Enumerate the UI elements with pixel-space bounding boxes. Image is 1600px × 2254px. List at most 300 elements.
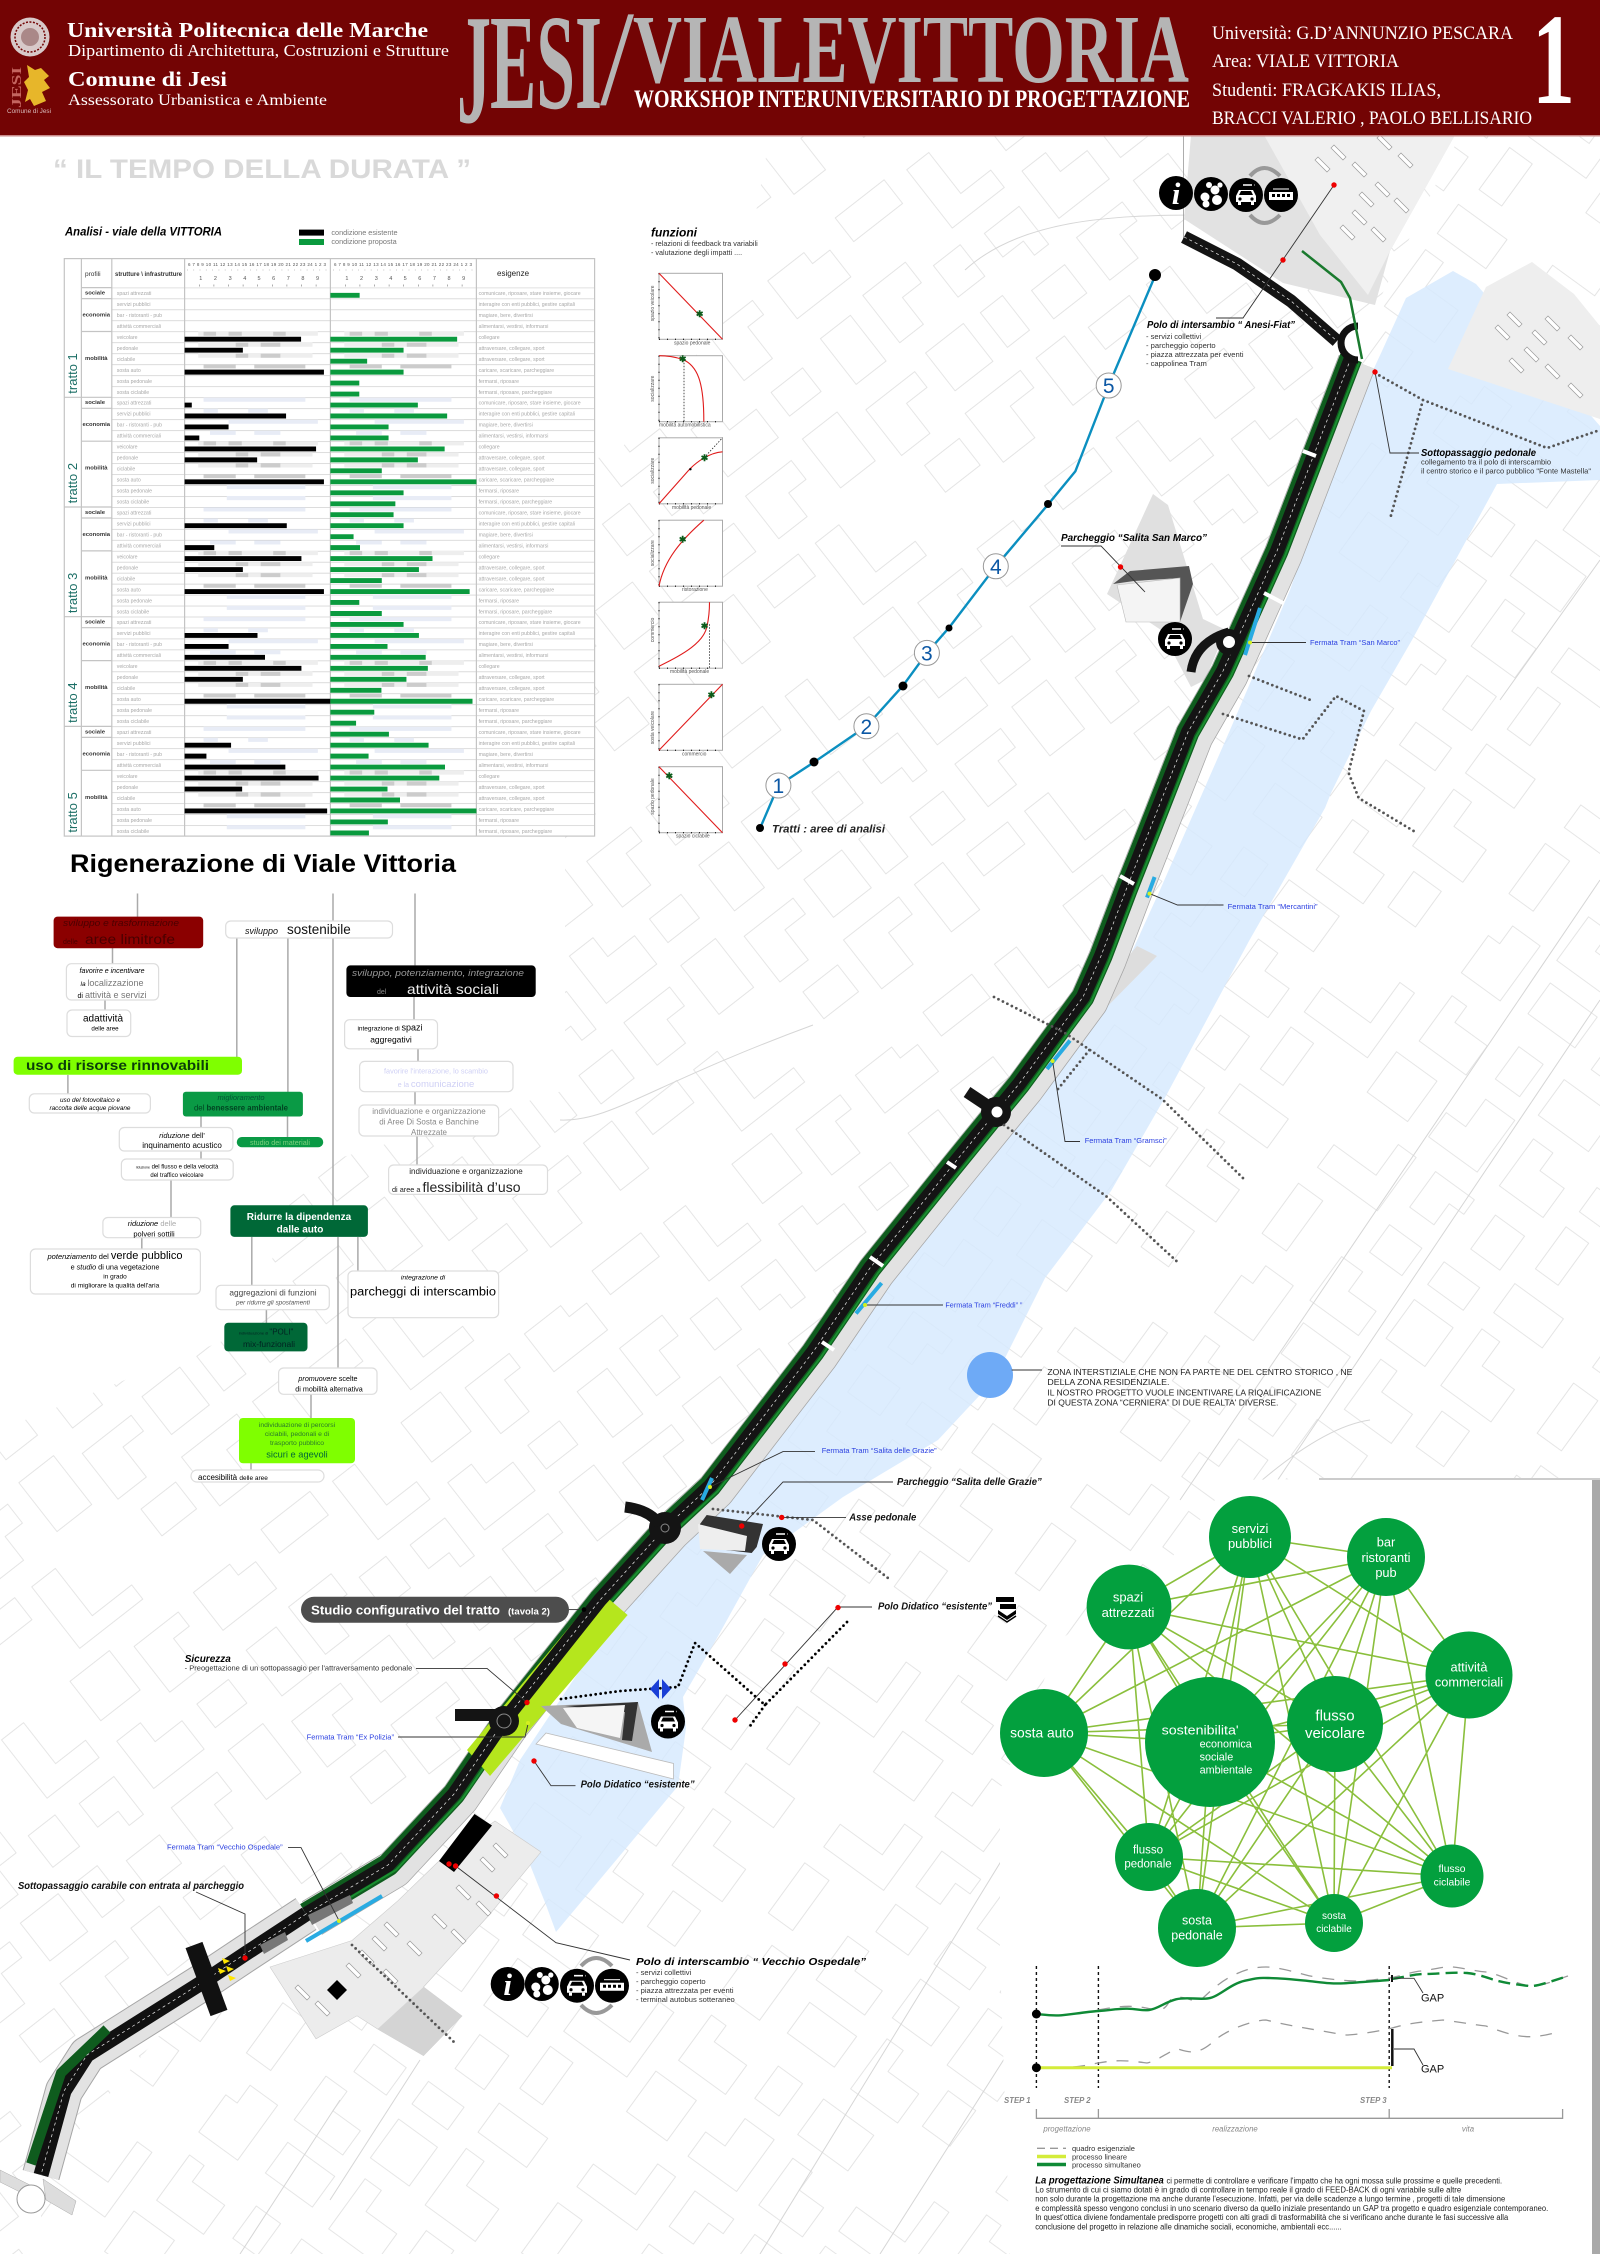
label: fermata Gramsci	[1051, 1059, 1167, 1145]
node: risorse rinnovabili: uso di risorse rinnovabili	[26, 1058, 209, 1073]
subtitle: “ IL TEMPO DELLA DURATA ”	[53, 154, 471, 184]
tratto 3 rows	[65, 510, 581, 615]
tratto 4 rows: fermarsi, riposare, parcheggiare	[479, 719, 552, 725]
label: polo didattico with leader	[732, 1602, 992, 1723]
tratto 3 rows: collegare	[479, 554, 500, 560]
node: spazi aggregativi: integrazione di spazi	[357, 1022, 423, 1032]
node: sicuri e agevoli	[239, 1418, 355, 1463]
node: sviluppo sostenibile	[226, 921, 392, 938]
table bars: existing condition (black)	[185, 337, 330, 813]
tratto 2 rows: spazi attrezzati	[117, 401, 151, 407]
table faint activity bars	[198, 332, 464, 829]
icon: Jesi crest	[7, 65, 51, 115]
tratto 3 rows: attraversare, collegare, sport	[479, 565, 545, 571]
node: sosta pedonale: sosta	[1182, 1914, 1212, 1928]
tratti label: Tratti : aree di analisi	[772, 823, 886, 835]
explanatory paragraph	[1035, 2174, 1548, 2231]
chart: socializzare / ristorazione: socializzare	[650, 540, 656, 566]
tratto 4 rows: fermarsi, riposare	[479, 708, 519, 714]
node: sosta ciclabile: sosta	[1322, 1911, 1346, 1922]
tratto 2 rows: sosta auto	[117, 478, 141, 484]
tratto 1 rows: spazi attrezzati	[117, 291, 151, 297]
node: comunicazione: favorire l'interazione, lo scambio	[384, 1066, 488, 1076]
tratto 1 rows: ciclabile	[117, 357, 135, 363]
tratto 1 rows: sosta pedonale	[117, 379, 152, 385]
map: parking Salita delle Grazie building	[698, 1515, 763, 1574]
node: aree di sosta	[359, 1105, 499, 1137]
pill: studio configurativo: (tavola 2)	[508, 1606, 550, 1616]
tratto 5 rows: mobilità	[85, 795, 108, 801]
icon: Jesi crest: JESI	[10, 67, 25, 108]
node: attività sociali	[346, 965, 536, 997]
node: aree limitrofe	[54, 917, 203, 948]
lower GAP: GAP	[1421, 2064, 1444, 2076]
icon: Jesi crest: Comune di Jesi	[7, 108, 51, 115]
chart: GAP timeline	[1004, 1966, 1568, 2231]
tratto 5 rows: ciclabile	[117, 796, 135, 802]
panel: analysis table	[64, 227, 595, 836]
node: sostenibilità: sostenibilita'	[1162, 1722, 1239, 1737]
explanatory paragraph: Lo strumento di cui ci siamo dotati è in grado di controllare in tempo reale il grado di FEED-BACK di ogni variabile sulle altre	[1035, 2186, 1461, 2194]
node: polveri sottili	[103, 1218, 201, 1238]
node: poli mix-funzionali: mix-funzionali	[243, 1339, 295, 1349]
node: localizzazione: favorire e incentivare	[80, 968, 145, 975]
header: institutions: Dipartimento di Architettura, Costruzioni e Strutture	[68, 41, 449, 60]
needs curve (upper)	[1098, 1967, 1568, 2010]
tratto 3 rows: sosta pedonale	[117, 598, 152, 604]
tratto 4 rows: sosta auto	[117, 697, 141, 703]
tratto 3 rows: caricare, scaricare, parcheggiare	[479, 587, 554, 593]
label: polo Anesi-Fiat: Polo di intersambio “ Anesi-Fiat”	[1147, 319, 1296, 331]
stop 4	[983, 554, 1008, 579]
label: polo Anesi-Fiat: - piazza attrezzata per eventi	[1146, 350, 1244, 359]
panel: network diagram	[1000, 1496, 1512, 1967]
tratto 5 rows: pedonale	[117, 785, 138, 791]
node: aree di sosta: di Aree Di Sosta e Banchine	[379, 1118, 479, 1126]
label: fermata ex polizia	[307, 1721, 530, 1742]
tratto 5 rows: sociale	[85, 729, 106, 735]
label: fermata Mercantini	[1148, 892, 1318, 911]
tratto 1 rows: servizi pubblici	[117, 302, 151, 308]
chart: sosta veicolare / commercio: sosta veicolare	[650, 711, 656, 744]
tratto 3 rows: sosta ciclabile	[117, 609, 149, 615]
tratto 5 rows: spazi attrezzati	[117, 730, 151, 736]
tratto 2 rows: sociale	[85, 400, 106, 406]
label: fermata Freddi	[863, 1300, 1023, 1310]
node: adattività: adattività	[83, 1013, 123, 1024]
explanatory paragraph: ci permette di controllare e verificare l'impatto che ha ogni mossa sulle prossime e quelle precedenti.	[1166, 2176, 1502, 2185]
icons: polo Anesi-Fiat	[1159, 168, 1298, 223]
diagram: tratti line with numbered stops	[756, 269, 1161, 835]
tratto 2 rows: mobilità	[85, 466, 108, 472]
tratto 3 rows: attività commerciali	[117, 543, 161, 549]
node: verde pubblico: in grado	[103, 1274, 127, 1280]
node: aree di sosta: Attrezzate	[411, 1128, 448, 1137]
label: polo vecchio ospedale: Polo di interscambio “ Vecchio Ospedale”	[636, 1956, 867, 1968]
node: mobilità alternativa	[279, 1368, 377, 1394]
node: servizi pubblici: servizi	[1232, 1521, 1269, 1536]
icons: polo vecchio ospedale: i	[503, 1967, 512, 2002]
pill: studio configurativo	[301, 1597, 586, 1623]
node: fotovoltaico: raccolta delle acque piovane	[49, 1105, 131, 1112]
tratto 5 rows: bar - ristoranti - pub	[117, 752, 162, 758]
node: localizzazione: di attività e servizi	[78, 990, 146, 1000]
label: fermata Salita delle Grazie: Fermata Tram “Salita delle Grazie”	[822, 1446, 937, 1455]
stop 2	[854, 714, 879, 739]
icons: polo vecchio ospedale	[491, 1958, 629, 2013]
label: asse pedonale: Asse pedonale	[848, 1512, 917, 1524]
node: sicuri e agevoli: trasporto pubblico	[270, 1440, 324, 1447]
node: verde pubblico	[30, 1249, 200, 1294]
tratto 3 rows: economia	[82, 532, 111, 538]
tratto 5 rows: sosta auto	[117, 807, 141, 813]
label: fermata San Marco	[1248, 638, 1400, 647]
tratto 2 rows: bar - ristoranti - pub	[117, 423, 162, 429]
node: attività commerciali: attività	[1450, 1659, 1488, 1674]
label: parcheggio Salita San Marco	[1061, 532, 1208, 592]
node: sicuri e agevoli: individuazione di percorsi	[259, 1422, 336, 1429]
explanatory paragraph: e complessità spesso vengono conclusi in uno scenario diverso da quello iniziale presentando un GAP tra progetto e quadro esigenziale contemporaneo.	[1035, 2204, 1548, 2213]
node: sicuri e agevoli: sicuri e agevoli	[266, 1450, 328, 1460]
title	[457, 0, 1190, 156]
chart: sosta veicolare / commercio	[650, 684, 722, 757]
node: flusso pedonale: flusso	[1133, 1844, 1163, 1856]
tratto 5 rows: attività commerciali	[117, 763, 161, 769]
node: fotovoltaico: uso del fotovoltaico e	[60, 1097, 120, 1104]
tratto 3 rows: fermarsi, riposare	[479, 598, 519, 604]
tratto 2 rows: pedonale	[117, 456, 138, 462]
tratto 4 rows: sociale	[85, 620, 106, 626]
node: mobilità alternativa: di mobilità alternativa	[295, 1384, 363, 1393]
table header: 123456789	[199, 276, 319, 282]
node: aggregazioni di funzioni: per ridurre gli spostamenti	[235, 1300, 311, 1306]
node: ridurre la dipendenza: Ridurre la dipendenza	[247, 1212, 352, 1223]
table header: 6 7 8 9 10 11 12 13 14 15 16 17 18 19 20 21 22 23 24 1 2 3	[334, 262, 472, 267]
chart: socializzare / mobilità pedonale: mobilità pedonale	[672, 505, 711, 511]
explanatory paragraph: non solo durante la progettazione ma anche durante l'esecuzione. Infatti, per via delle scadenze a lungo termine , progetti di tale dimensione	[1035, 2195, 1505, 2204]
label: fermata vecchio ospedale	[167, 1842, 341, 1923]
node: aree limitrofe: sviluppo e trasformazione	[63, 918, 179, 928]
step labels: STEP 2	[1064, 2096, 1091, 2105]
tratto 1 rows: fermarsi, riposare	[479, 379, 519, 385]
tratto 2 rows: servizi pubblici	[117, 412, 151, 418]
tratto 5 rows: sosta ciclabile	[117, 829, 149, 835]
label: polo Anesi-Fiat: - parcheggio coperto	[1146, 341, 1216, 350]
chart: spazio veicolare / spazio pedonale: ✱	[696, 309, 704, 319]
tratto 5 rows	[65, 729, 581, 835]
table grid	[64, 259, 595, 836]
chart: socializzare / ristorazione: ✱	[679, 535, 687, 545]
tratto 3 rows: veicolare	[117, 554, 138, 560]
header: area and students: Studenti: FRAGKAKIS ILIAS,	[1212, 80, 1441, 101]
node: inquinamento acustico	[119, 1128, 233, 1151]
node: sviluppo sostenibile: sostenibile	[287, 922, 351, 937]
tratto 5 rows: fermarsi, riposare, parcheggiare	[479, 829, 552, 835]
table header: 123456789	[345, 276, 465, 282]
node: sosta pedonale	[1158, 1889, 1236, 1967]
node: mobilità alternativa: promuovere scelte	[297, 1374, 358, 1383]
tratto 5 rows: veicolare	[117, 774, 138, 780]
node: spazi attrezzati: attrezzati	[1102, 1605, 1154, 1620]
node: inquinamento acustico: riduzione dell'	[159, 1131, 205, 1140]
icon: car San Marco	[1158, 622, 1192, 656]
phase labels: progettazione	[1042, 2124, 1091, 2134]
stop 1: 1	[773, 775, 784, 798]
chart: spazio veicolare / spazio pedonale	[650, 273, 722, 346]
tratto 1 rows: sosta ciclabile	[117, 390, 149, 396]
table header: strutture \ infrastrutture	[115, 271, 182, 278]
node: attività commerciali: commerciali	[1435, 1675, 1503, 1690]
node: fotovoltaico	[29, 1094, 150, 1113]
node: servizi pubblici: pubblici	[1228, 1536, 1272, 1551]
tratto 4 rows: collegare	[479, 664, 500, 670]
tratto 2 rows: attraversare, collegare, sport	[479, 467, 545, 473]
tratto 4 rows: pedonale	[117, 675, 138, 681]
stop 5	[1096, 373, 1121, 398]
title: WORKSHOP INTERUNIVERSITARIO DI PROGETTAZIONE	[634, 86, 1190, 113]
lower GAP	[1392, 2029, 1444, 2076]
node: verde pubblico: di migliorare la qualità dell'aria	[71, 1282, 160, 1290]
tratto 1 rows	[65, 290, 581, 396]
explanatory paragraph: conclusione del progetto in relazione alle dinamiche sociali, economiche, ambientali ecc......	[1035, 2222, 1342, 2231]
phase labels: realizzazione	[1212, 2124, 1258, 2134]
header: institutions	[67, 18, 449, 109]
tratto 1 rows: interagire con enti pubblici, gestire capitali	[479, 302, 575, 308]
right edge strip and panel line	[1592, 1480, 1600, 2254]
map: parking Salita San Marco building	[1113, 566, 1193, 622]
icon: car ex polizia	[651, 1704, 685, 1738]
panel: mind map Rigenerazione	[14, 850, 548, 1482]
node: parcheggi di interscambio	[348, 1271, 499, 1318]
node: aree limitrofe: delle	[63, 939, 78, 946]
mind map connectors	[68, 894, 418, 1470]
tratto 2 rows: ciclabile	[117, 467, 135, 473]
phase labels: vita	[1462, 2124, 1475, 2134]
tratto 2 rows: sosta ciclabile	[117, 500, 149, 506]
tratto 1 rows: alimentarsi, vestirsi, informarsi	[479, 324, 548, 330]
chart: spazio veicolare / spazio pedonale: spazio veicolare	[650, 285, 656, 321]
node: verde pubblico: potenziamento del verde pubblico	[47, 1250, 182, 1262]
map: black buildings at Vecchio Ospedale	[327, 1814, 492, 2000]
tratto 4 rows: alimentarsi, vestirsi, informarsi	[479, 653, 548, 659]
icon: university seal	[10, 18, 50, 56]
table legend: condizione proposta	[331, 237, 398, 246]
node: studio dei materiali: studio dei materiali	[250, 1138, 310, 1147]
tratto 3 rows: sosta auto	[117, 587, 141, 593]
GAP legend: processo simultaneo	[1072, 2160, 1141, 2170]
map: main road Viale della Vittoria	[31, 358, 1359, 2175]
tratto 1 rows: fermarsi, riposare, parcheggiare	[479, 390, 552, 396]
node: flusso e velocità	[121, 1159, 233, 1180]
tratto 1 rows: sociale	[85, 290, 106, 296]
label: sottopassaggio pedonale	[1372, 369, 1591, 476]
callout: zona interstiziale: IL NOSTRO PROGETTO VUOLE INCENTIVARE LA RIQALIFICAZIONE	[1047, 1388, 1322, 1398]
tratto 4 rows: caricare, scaricare, parcheggiare	[479, 697, 554, 703]
chart: spazio pedonale / spazio ciclabile: spazio pedonale	[650, 778, 656, 815]
tratto 3 rows: attraversare, collegare, sport	[479, 576, 545, 582]
mind map title: Rigenerazione di Viale Vittoria	[70, 850, 457, 878]
chart: socializzare / mobilità pedonale: ✱	[701, 453, 709, 463]
tratto 5 rows: tratto 5	[65, 792, 80, 833]
tratto 2 rows: interagire con enti pubblici, gestire capitali	[479, 412, 575, 418]
table bars: proposed condition (green)	[330, 293, 476, 835]
upper GAP	[1392, 1975, 1444, 2005]
label: parcheggio Salita delle Grazie	[739, 1477, 1042, 1529]
header: institutions: Assessorato Urbanistica e Ambiente	[68, 92, 327, 109]
callout: zona interstiziale: ZONA INTERSTIZIALE CHE NON FA PARTE NE DEL CENTRO STORICO , NE	[1047, 1367, 1353, 1377]
chart: commercio / mobilità pedonale: mobilità pedonale	[670, 669, 709, 675]
tratto 3 rows: alimentarsi, vestirsi, informarsi	[479, 543, 548, 549]
node: sosta auto	[1000, 1689, 1088, 1777]
header: institutions: Università Politecnica delle Marche	[67, 18, 428, 42]
node: aree di sosta: individuazione e organizzazione	[372, 1107, 486, 1116]
GAP legend: processo lineare	[1072, 2152, 1127, 2161]
node: sviluppo sostenibile: sviluppo	[245, 926, 278, 936]
tratto 3 rows: tratto 3	[65, 573, 80, 613]
node: aggregazioni di funzioni: aggregazioni di funzioni	[229, 1288, 317, 1298]
tratto 2 rows: comunicare, riposare, stare insieme, giocare	[479, 401, 581, 407]
tratto 2 rows: fermarsi, riposare, parcheggiare	[479, 500, 552, 506]
callout: zona interstiziale: DELLA ZONA RESIDENZIALE.	[1047, 1377, 1169, 1387]
tratto 1 rows: tratto 1	[65, 353, 80, 394]
node: sicuri e agevoli: ciclabili, pedonali e di	[265, 1431, 330, 1438]
callout: zona interstiziale	[967, 1352, 1353, 1408]
node: localizzazione: la localizzazione	[81, 978, 143, 988]
node: poli mix-funzionali: individuazione di "POLI"	[239, 1328, 293, 1336]
tratto 5 rows: alimentarsi, vestirsi, informarsi	[479, 763, 548, 769]
tratto 1 rows: collegare	[479, 335, 500, 341]
header: area and students: BRACCI VALERIO , PAOLO BELLISARIO	[1212, 108, 1532, 129]
label: sicurezza	[185, 1654, 530, 1705]
tratto 3 rows: interagire con enti pubblici, gestire capitali	[479, 521, 575, 527]
node: sosta auto: sosta auto	[1010, 1726, 1074, 1741]
tratto 1 rows: bar - ristoranti - pub	[117, 313, 162, 319]
tratto 4 rows: servizi pubblici	[117, 631, 151, 637]
step labels: STEP 3	[1360, 2096, 1387, 2105]
tratto 1 rows: attraversare, collegare, sport	[479, 357, 545, 363]
tratto 1 rows: veicolare	[117, 335, 138, 341]
node: flusso ciclabile: flusso	[1439, 1864, 1466, 1875]
tratto 5 rows: economia	[82, 751, 111, 757]
tratto 3 rows: servizi pubblici	[117, 521, 151, 527]
tratto 2 rows: caricare, scaricare, parcheggiare	[479, 478, 554, 484]
label: sottopassaggio carabile: Sottopassaggio carabile con entrata al parcheggio	[18, 1881, 244, 1892]
GAP legend	[1037, 2144, 1141, 2170]
label: polo Anesi-Fiat: - cappolinea Tram	[1146, 359, 1207, 368]
node: bar ristoranti pub: ristoranti	[1361, 1550, 1411, 1565]
node: sosta ciclabile	[1305, 1894, 1363, 1952]
label: polo Anesi-Fiat	[1146, 182, 1337, 368]
node: sostenibilità: economica	[1200, 1739, 1252, 1751]
label: fermata Freddi: Fermata Tram “Freddi” ”	[945, 1300, 1023, 1310]
tratto 3 rows: mobilità	[85, 575, 108, 581]
funzioni heading: funzioni	[651, 226, 698, 240]
tratto 2 rows: tratto 2	[65, 463, 80, 503]
tratto 4 rows: attraversare, collegare, sport	[479, 675, 545, 681]
needs curve (lower)	[1073, 2020, 1558, 2067]
node: parcheggi di interscambio: parcheggi di interscambio	[350, 1286, 496, 1298]
phase bracket	[1036, 2109, 1563, 2118]
chart: commercio / mobilità pedonale	[650, 602, 722, 675]
node: sosta ciclabile: ciclabile	[1316, 1924, 1352, 1935]
stop 5: 5	[1103, 375, 1115, 398]
node: bar ristoranti pub	[1347, 1518, 1425, 1596]
tratto 5 rows: caricare, scaricare, parcheggiare	[479, 807, 554, 813]
label: asse pedonale	[779, 1512, 917, 1524]
tratto 4 rows: ciclabile	[117, 686, 135, 692]
node: benessere ambientale	[183, 1092, 303, 1116]
node: servizi pubblici	[1209, 1496, 1291, 1578]
table legend: condizione esistente	[331, 228, 398, 237]
node: sostenibilità	[1145, 1677, 1275, 1807]
chart: socializzare / mobilità automobilistica: ✱	[679, 354, 687, 364]
node: comunicazione: e la comunicazione	[398, 1079, 474, 1090]
GAP legend: quadro esigenziale	[1072, 2144, 1135, 2153]
label: polo didatico esistente lower: Polo Didatico “esistente”	[581, 1780, 695, 1790]
node: sostenibilità: sociale	[1200, 1752, 1233, 1764]
tratto 4 rows: spazi attrezzati	[117, 620, 151, 626]
node: flessibilità d'uso: individuazione e organizzazione	[409, 1167, 523, 1176]
tratto 3 rows: magiare, bere, divertirsi	[479, 532, 533, 538]
node: attività sociali: del	[377, 989, 387, 996]
tratto 1 rows: mobilità	[85, 356, 108, 362]
node: attività sociali: sviluppo, potenziamento, integrazione	[352, 968, 524, 978]
tratto 2 rows	[65, 400, 581, 506]
node: comunicazione	[360, 1061, 513, 1092]
header band	[0, 0, 1600, 156]
icon: blue double arrow	[650, 1679, 671, 1699]
label: sicurezza: - Preogettazione di un sottopassagio per l'attraversamento pedonale	[185, 1664, 412, 1673]
tratto 2 rows: sosta pedonale	[117, 489, 152, 495]
table header: profili	[85, 271, 101, 278]
node: flusso veicolare: flusso	[1315, 1708, 1355, 1725]
chart: socializzare / mobilità automobilistica: socializzare	[650, 375, 656, 402]
node: verde pubblico: e studio di una vegetazione	[71, 1262, 159, 1272]
funzioni heading: - relazioni di feedback tra variabili	[651, 239, 758, 248]
label: polo didatico esistente lower	[531, 1758, 695, 1790]
tratto 4 rows: tratto 4	[65, 682, 80, 723]
chart: spazio pedonale / spazio ciclabile: spazio ciclabile	[676, 834, 710, 840]
header: area and students: Area: VIALE VITTORIA	[1212, 51, 1399, 72]
map: tram stops (blue stripes)	[306, 608, 1260, 1941]
tratto 1 rows: economia	[82, 312, 111, 318]
tratto 4 rows: attraversare, collegare, sport	[479, 686, 545, 692]
node: bar ristoranti pub: pub	[1375, 1565, 1397, 1580]
simultaneous process curve	[1036, 1978, 1389, 2016]
label: fermata ex polizia: Fermata Tram “Ex Polizia”	[307, 1732, 394, 1742]
tratto 3 rows: bar - ristoranti - pub	[117, 532, 162, 538]
label: fermata Gramsci: Fermata Tram “Gramsci”	[1085, 1136, 1167, 1145]
phase labels	[1042, 2124, 1475, 2134]
node: localizzazione	[66, 964, 159, 1000]
explanatory paragraph: La progettazione Simultanea	[1035, 2174, 1164, 2186]
tratto 1 rows: magiare, bere, divertirsi	[479, 313, 533, 319]
funzioni heading	[651, 226, 758, 257]
tratto 1 rows: attraversare, collegare, sport	[479, 346, 545, 352]
node: risorse rinnovabili	[14, 1057, 242, 1075]
tratto 1 rows: comunicare, riposare, stare insieme, giocare	[479, 291, 581, 297]
map: ex polizia building	[536, 1702, 674, 1779]
step markers	[1036, 1966, 1389, 2088]
node: flessibilità d'uso: di aree a flessibilità d’uso	[392, 1179, 521, 1195]
tratto 2 rows: collegare	[479, 445, 500, 451]
tratto 3 rows: ciclabile	[117, 576, 135, 582]
tratto 5 rows: fermarsi, riposare	[479, 818, 519, 824]
tratto 4 rows: attività commerciali	[117, 653, 161, 659]
node: spazi aggregativi: aggregativi	[370, 1034, 412, 1044]
node: flusso ciclabile	[1420, 1844, 1484, 1908]
chart: spazio pedonale / spazio ciclabile: ✱	[666, 771, 674, 781]
